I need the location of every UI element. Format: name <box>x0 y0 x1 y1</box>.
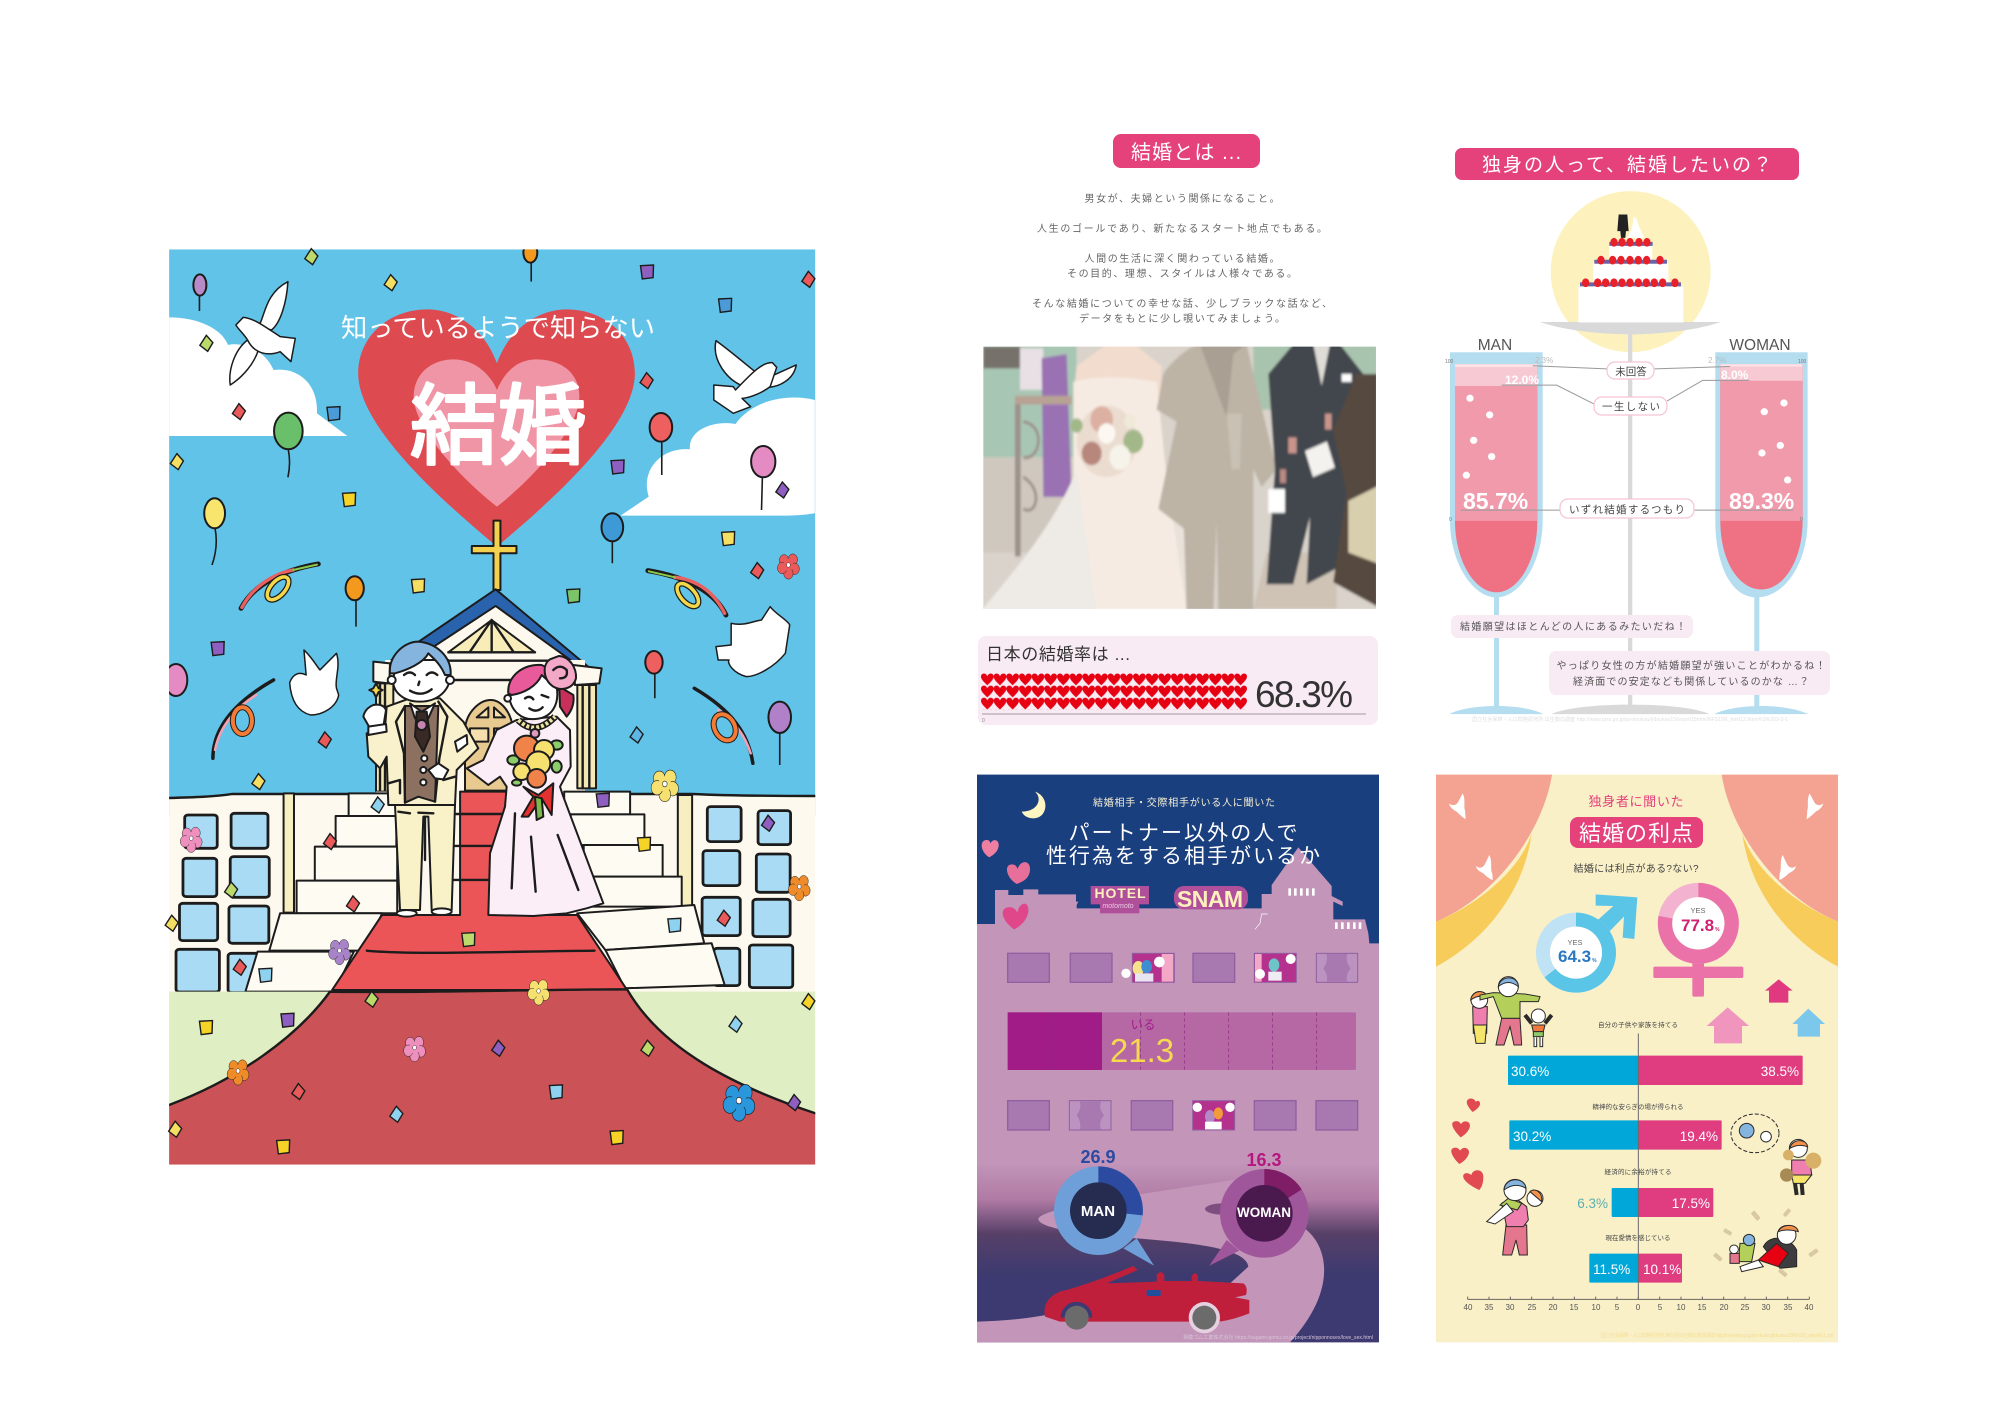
percentages on glasses <box>1463 368 1794 514</box>
chart axis labels: 10 <box>1677 1303 1686 1312</box>
answer labels: 未回答 <box>1615 365 1647 378</box>
bar chart: benefits by gender <box>1464 1020 1814 1312</box>
donut values: 64.3% <box>1558 947 1597 966</box>
panel: merits of marriage <box>1436 775 1838 1342</box>
rate value: 68.3% <box>1255 674 1353 715</box>
percentages on glasses: 85.7% <box>1463 488 1528 514</box>
illustration: thinking woman <box>1731 1114 1821 1195</box>
bar category labels <box>1592 1020 1684 1242</box>
callout: left comment: 結婚願望はほとんどの人にあるみたいだね！ <box>1460 620 1686 633</box>
illustration: man carrying woman <box>1487 1179 1543 1255</box>
intro text block: 男女が、夫婦という関係になること。 <box>1084 192 1280 205</box>
percentages on glasses: 8.0% <box>1721 368 1749 382</box>
speech bubble: man <box>1054 1166 1154 1266</box>
callout: right comment: やっぱり女性の方が結婚願望が強いことがわかるね！ <box>1556 659 1826 672</box>
chart axis labels: 0 <box>1636 1303 1641 1312</box>
illustration: bride and groom <box>363 642 603 917</box>
axis ticks and small values <box>1445 356 1807 523</box>
intro text block <box>1032 192 1332 325</box>
axis ticks and small values: 0 <box>1800 517 1803 523</box>
chart axis labels: 25 <box>1741 1303 1750 1312</box>
confetti and flowers <box>165 249 815 1154</box>
bar value labels <box>1511 1064 1799 1277</box>
illustration: woman with money <box>1713 1208 1819 1277</box>
chart: female donut <box>1653 890 1743 997</box>
question text: 結婚には利点がある?ない? <box>1574 862 1699 875</box>
axis ticks and small values: 100 <box>1445 359 1454 365</box>
bar value labels: 38.5% <box>1761 1064 1799 1079</box>
hotel signs: HOTEL <box>1094 885 1146 901</box>
chart axis labels: 25 <box>1528 1303 1537 1312</box>
gender labels: WOMAN <box>1729 337 1791 354</box>
chart axis labels: 15 <box>1698 1303 1707 1312</box>
chart axis labels: 20 <box>1720 1303 1729 1312</box>
sky with clouds, balloons, doves and big heart <box>165 243 815 816</box>
axis ticks and small values: 2.3% <box>1535 356 1553 365</box>
label: man values <box>1080 1147 1116 1220</box>
chart axis labels <box>1464 1303 1814 1312</box>
gender labels: MAN <box>1478 337 1512 354</box>
cake and champagne glasses <box>1449 191 1808 714</box>
groom <box>363 642 478 917</box>
chart axis labels: 30 <box>1762 1303 1771 1312</box>
intro text block: 人生のゴールであり、新たなるスタート地点でもある。 <box>1037 222 1327 235</box>
panel: do singles want to marry <box>1445 148 1830 723</box>
heading pill: 独身の人って、結婚したいの？ <box>1482 154 1772 176</box>
answer labels: 一生しない <box>1602 400 1660 413</box>
icons: houses <box>1707 979 1825 1043</box>
answer labels: いずれ結婚するつもり <box>1569 503 1685 516</box>
donut values: YES <box>1567 938 1583 947</box>
panel: poster cover <box>165 243 815 1165</box>
chart axis labels: 40 <box>1464 1303 1473 1312</box>
source note: 相模ゴム工業株式会社 https://sagami-gomu.co.jp/project/nipponnosex/love_sex.html <box>1183 1334 1373 1341</box>
source note: 国立社会保障・人口問題研究所 出生動向調査 http://www.ipss.go.jp/ps-doukou/j/doukou15/report15html/NFS15R_html12.html#h3%203-3-1 <box>1472 716 1788 723</box>
chart axis labels: 30 <box>1506 1303 1515 1312</box>
chart axis labels: 35 <box>1784 1303 1793 1312</box>
bar value labels: 11.5% <box>1593 1262 1630 1277</box>
heading pill <box>1455 148 1799 180</box>
marriage rate box <box>978 636 1378 725</box>
steps, windows, carpet and lawn <box>169 792 815 1165</box>
hotel night scene <box>977 775 1379 1342</box>
percentages on glasses: 89.3% <box>1729 488 1794 514</box>
bar value labels: 19.4% <box>1680 1129 1718 1144</box>
bar value labels: 17.5% <box>1672 1196 1710 1211</box>
heading pill: 結婚とは ... <box>1131 141 1241 164</box>
source note: 国立社会保障・人口問題研究所 第15回出生動向基本調査 http://www.ipss.go.jp/ps-doukou/j/doukou15/NFS15_reportALL.pdf <box>1601 1332 1834 1339</box>
chart axis labels: 5 <box>1615 1303 1620 1312</box>
bar value labels: 30.6% <box>1511 1064 1549 1079</box>
chart axis labels: 20 <box>1549 1303 1558 1312</box>
heading pill <box>1570 817 1703 848</box>
donut values: 77.8% <box>1681 916 1720 935</box>
chart axis labels: 35 <box>1485 1303 1494 1312</box>
hotel signs <box>1094 885 1243 912</box>
main heading: 性行為をする相手がいるか <box>1046 845 1320 868</box>
axis ticks and small values: 2.7% <box>1708 356 1726 365</box>
main heading <box>1046 822 1320 868</box>
icon: red convertible car <box>1044 1266 1249 1333</box>
axis ticks and small values: 100 <box>1798 359 1807 365</box>
callout: right comment <box>1549 651 1830 695</box>
bar category labels: 現在愛情を感じている <box>1606 1233 1670 1242</box>
chart axis labels: 10 <box>1592 1303 1601 1312</box>
intro text block: その目的、理想、スタイルは人様々である。 <box>1067 267 1297 280</box>
hotel signs: SNAM <box>1177 886 1243 912</box>
title: 結婚 <box>410 377 586 476</box>
icons: red hearts <box>1451 1099 1483 1190</box>
bride <box>467 656 603 916</box>
marriage rate box: 0 <box>982 718 985 724</box>
church facade <box>373 620 602 793</box>
label: man values: MAN <box>1081 1203 1115 1220</box>
heading pill <box>1113 134 1260 168</box>
donut values <box>1558 906 1720 966</box>
main heading: パートナー以外の人で <box>1068 822 1298 845</box>
bar category labels: 経済的に余裕が持てる <box>1604 1167 1672 1176</box>
heading pill: 結婚の利点 <box>1579 821 1693 846</box>
answer labels <box>1560 362 1694 518</box>
photo of couple <box>980 342 1380 616</box>
chart: male donut <box>1543 894 1637 986</box>
speech bubble: woman <box>1205 1169 1309 1266</box>
axis ticks and small values: 0 <box>1449 517 1452 523</box>
bar value labels: 6.3% <box>1577 1196 1608 1211</box>
donut values: YES <box>1690 906 1706 915</box>
panel: hotel affair <box>977 775 1379 1342</box>
label: man values: 26.9 <box>1080 1147 1116 1167</box>
chart axis labels: 15 <box>1570 1303 1579 1312</box>
callout: right comment: 経済面での安定なども関係しているのかな …？ <box>1573 675 1809 688</box>
intro text block: そんな結婚についての幸せな話、少しブラックな話など、 <box>1032 297 1332 310</box>
sub heading: 独身者に聞いた <box>1588 794 1684 809</box>
marriage rate box: 日本の結婚率は ... <box>986 645 1130 664</box>
gender labels <box>1478 337 1791 354</box>
stage background and curtains <box>1436 775 1838 1342</box>
hotel signs: motomoto <box>1102 903 1134 910</box>
value: yes 21.3: 21.3 <box>1110 1032 1174 1069</box>
subtitle text: 知っているようで知らない <box>341 308 655 345</box>
intro text block: 人間の生活に深く関わっている結婚。 <box>1084 252 1280 265</box>
heart pictogram row <box>981 674 1247 710</box>
label: woman values: WOMAN <box>1237 1205 1291 1220</box>
bar value labels: 30.2% <box>1513 1129 1551 1144</box>
label: woman values: 16.3 <box>1246 1150 1282 1170</box>
panel: what is marriage <box>978 134 1380 725</box>
callout: left comment <box>1451 615 1693 638</box>
illustration: family <box>1471 977 1552 1047</box>
bar value labels: 10.1% <box>1643 1262 1681 1277</box>
intro text block: データをもとに少し覗いてみましょう。 <box>1079 312 1285 325</box>
value: yes 21.3: いる <box>1130 1018 1156 1032</box>
label: woman values <box>1237 1150 1291 1220</box>
sub heading: 結婚相手・交際相手がいる人に聞いた <box>1093 796 1275 809</box>
chart axis labels: 40 <box>1805 1303 1814 1312</box>
chart axis labels: 5 <box>1658 1303 1663 1312</box>
bar category labels: 自分の子供や家族を持てる <box>1598 1020 1678 1029</box>
percentages on glasses: 12.0% <box>1505 373 1539 387</box>
bar category labels: 精神的な安らぎの場が得られる <box>1592 1102 1684 1111</box>
